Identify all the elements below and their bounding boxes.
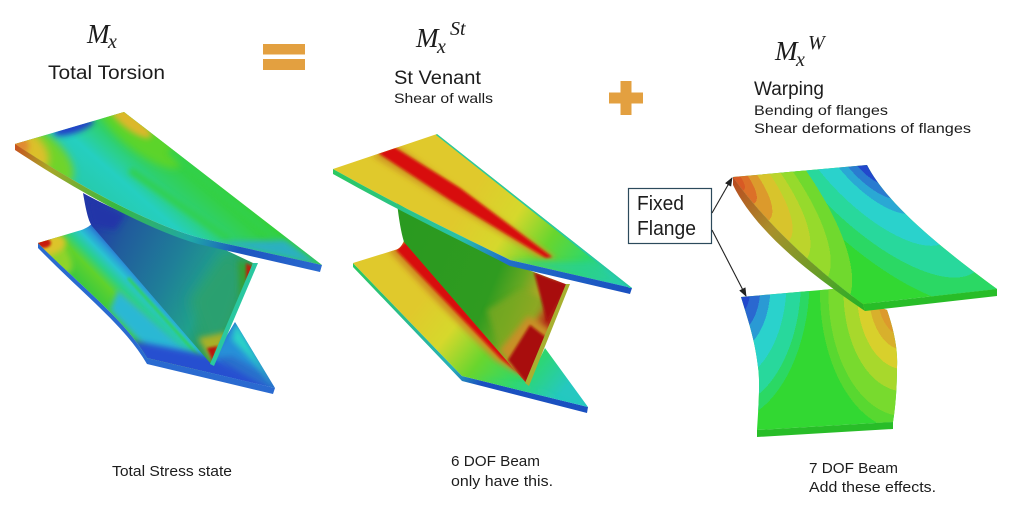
beam: total stress contour bbox=[15, 112, 322, 394]
text: shear of walls: Shear of walls bbox=[394, 90, 493, 106]
caption: 7 DOF beam bbox=[809, 460, 936, 496]
heading: Total Torsion: Total Torsion bbox=[48, 63, 165, 84]
top flange edge bbox=[333, 169, 632, 294]
caption: 6 DOF beam: only have this. bbox=[451, 473, 553, 490]
beam: St Venant contour bbox=[325, 130, 640, 415]
title: St Venant symbol: M bbox=[415, 23, 440, 53]
title: total torsion symbol bbox=[86, 19, 117, 53]
title: St Venant symbol bbox=[415, 18, 466, 58]
title: warping symbol: x bbox=[795, 49, 805, 71]
warping flanges bbox=[733, 165, 997, 437]
text: warping effects bbox=[754, 102, 971, 136]
callout: fixed flange: Fixed bbox=[637, 193, 684, 215]
icon: equals sign bbox=[263, 44, 305, 70]
title: total torsion symbol: x bbox=[107, 31, 117, 53]
text: warping effects: Shear deformations of flanges bbox=[754, 120, 971, 136]
arrow: to upper flange bbox=[712, 178, 732, 213]
web thin edge bbox=[525, 284, 570, 386]
title: warping symbol: M bbox=[774, 36, 799, 66]
callout: fixed flange bbox=[628, 188, 712, 244]
title: total torsion symbol: M bbox=[86, 19, 111, 49]
title: St Venant symbol: x bbox=[436, 36, 446, 58]
caption: 6 DOF beam bbox=[451, 453, 553, 490]
caption: 7 DOF beam: Add these effects. bbox=[809, 479, 936, 496]
lower flange edge bbox=[353, 263, 588, 413]
heading: St Venant: St Venant bbox=[394, 68, 482, 89]
lower flange bbox=[353, 241, 588, 407]
caption: total stress state: Total Stress state bbox=[112, 463, 232, 480]
web bbox=[83, 193, 253, 364]
top flange edge bbox=[15, 144, 322, 272]
lower flange bbox=[38, 224, 275, 388]
lower flange edge bbox=[38, 243, 275, 394]
top flange bbox=[15, 112, 322, 265]
web thin edge bbox=[210, 263, 258, 366]
title: St Venant symbol: St bbox=[450, 18, 466, 40]
caption: 7 DOF beam: 7 DOF Beam bbox=[809, 460, 898, 477]
text: warping effects: Bending of flanges bbox=[754, 102, 888, 118]
arrow: to lower flange bbox=[712, 230, 746, 296]
title: warping symbol: W bbox=[808, 32, 827, 54]
web bbox=[397, 204, 566, 382]
title: warping symbol bbox=[774, 32, 827, 71]
top flange bbox=[333, 134, 632, 288]
upper flange plate bbox=[733, 165, 997, 311]
caption: 6 DOF beam: 6 DOF Beam bbox=[451, 453, 540, 470]
lower flange plate bbox=[741, 289, 897, 437]
callout: fixed flange: Flange bbox=[637, 218, 696, 240]
callout box bbox=[628, 188, 712, 244]
icon: plus sign bbox=[609, 81, 643, 115]
heading: Warping: Warping bbox=[754, 79, 824, 100]
